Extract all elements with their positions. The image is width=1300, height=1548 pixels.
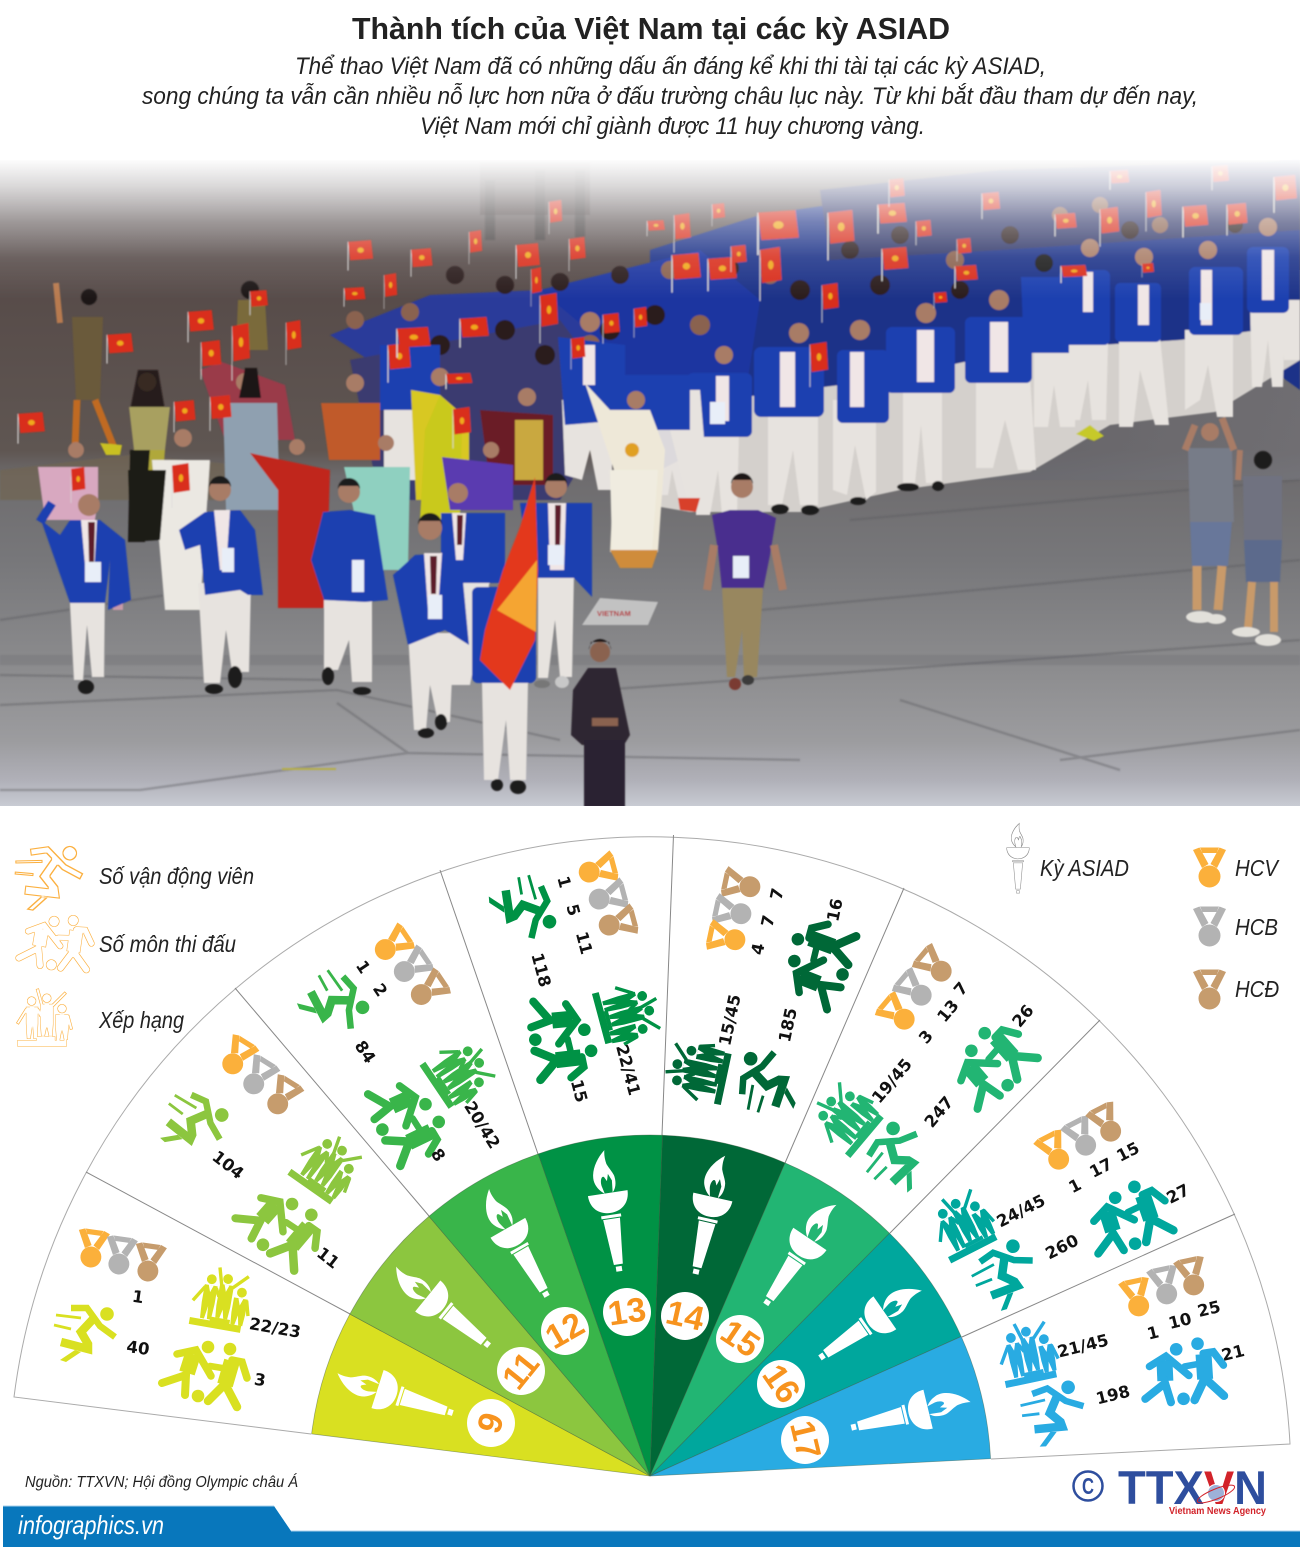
coloured fan wedges	[312, 1135, 991, 1476]
sports value: 15	[567, 1077, 591, 1105]
logo: TTXVN: Vietnam News Agency	[1169, 1505, 1266, 1517]
logo: TTXVN: TTXVN	[1118, 1461, 1267, 1514]
icon: sports outline	[14, 911, 95, 979]
medals	[214, 1032, 306, 1121]
intro text: Thể thao Việt Nam đã có những dấu ấn đáng kể khi thi tài tại các kỳ ASIAD,	[295, 53, 1046, 80]
sports value: 26	[1008, 1001, 1038, 1031]
icon: sports	[153, 1329, 256, 1419]
edition number badges: 17	[782, 1417, 828, 1463]
sports value: 27	[1163, 1180, 1193, 1208]
icon: gold medal	[1193, 848, 1226, 888]
medal counts	[1145, 1297, 1222, 1344]
edition number badges: 13	[605, 1290, 649, 1334]
right crowd marchers	[640, 218, 1300, 515]
athletes value: 40	[125, 1337, 151, 1359]
panel: ASIAD 15	[804, 941, 1052, 1205]
title: Thành tích của Việt Nam tại các kỳ ASIAD	[352, 11, 950, 46]
ranking value: 22/23	[248, 1314, 302, 1342]
icon: ranking	[592, 978, 666, 1049]
intro text: Việt Nam mới chỉ giành được 11 huy chương vàng.	[420, 113, 925, 140]
athletes value: 185	[775, 1006, 801, 1044]
front row delegates	[40, 473, 783, 807]
athletes value: 198	[1094, 1382, 1132, 1408]
label: silver: HCB	[1235, 914, 1278, 940]
medal counts: 5	[562, 902, 584, 918]
front row delegates: VIETNAM	[597, 609, 631, 618]
crowd back mass	[650, 170, 1300, 430]
icon: sports	[773, 913, 868, 1020]
medal counts: 7	[767, 886, 787, 902]
ranking value: 20/42	[460, 1098, 504, 1152]
medal counts: 11	[572, 929, 596, 957]
medal counts: 7	[758, 913, 778, 929]
panel: ASIAD 16	[924, 1100, 1193, 1319]
label: edition: Kỳ ASIAD	[1040, 855, 1129, 881]
ranking value: 21/45	[1055, 1330, 1111, 1362]
medal counts	[1066, 1138, 1143, 1197]
medal counts: 17	[1086, 1154, 1116, 1182]
ranking value: 19/45	[868, 1055, 916, 1107]
medal counts	[748, 886, 787, 957]
torches	[330, 1148, 975, 1447]
medal counts: 2	[369, 980, 391, 1000]
athletes value: 104	[209, 1147, 247, 1183]
icon: athletes	[1014, 1377, 1094, 1452]
medal counts	[915, 978, 972, 1048]
ranking value: 24/45	[994, 1191, 1048, 1231]
medals	[705, 866, 763, 957]
helpers on the right	[1185, 418, 1282, 646]
ranking value: 15/45	[715, 993, 745, 1047]
athletes value: 118	[527, 951, 555, 989]
medal counts: 7	[950, 978, 972, 1000]
sports value: 11	[313, 1243, 343, 1273]
fan outer outline and panel dividers	[14, 835, 1290, 1459]
medal counts: 1	[352, 957, 374, 977]
panel: ASIAD 13	[483, 850, 666, 1105]
icon: sports	[1069, 1166, 1187, 1277]
edition number badges: 9	[470, 1408, 512, 1438]
label: gold: HCV	[1235, 855, 1280, 881]
logo: TTXVN: C	[1082, 1473, 1094, 1499]
medal counts: 15	[1113, 1138, 1143, 1166]
icon: sports	[933, 1007, 1052, 1129]
sports value: 16	[823, 897, 847, 923]
medal counts	[352, 957, 391, 1000]
sports value: 21	[1220, 1341, 1246, 1365]
medals	[74, 1228, 167, 1284]
source note: Nguồn: TTXVN; Hội đồng Olympic châu Á	[25, 1472, 298, 1491]
intro text	[142, 53, 1198, 140]
sports value: 3	[253, 1370, 267, 1390]
edition number badges: 16	[755, 1358, 807, 1410]
icon: ranking	[804, 1075, 887, 1158]
icon: sports	[218, 1170, 338, 1285]
panel: ASIAD 12	[287, 921, 504, 1180]
label: sports: Số môn thi đấu	[99, 931, 236, 957]
medal counts: 4	[748, 941, 768, 957]
panel: ASIAD 17	[994, 1255, 1246, 1452]
medals	[873, 941, 959, 1038]
label: bronze: HCĐ	[1235, 976, 1279, 1002]
icon: athletes	[853, 1112, 945, 1205]
medal counts: 10	[1167, 1309, 1193, 1333]
medal counts	[553, 874, 596, 957]
legend: torch and medals	[1006, 823, 1280, 1010]
icon: sports	[1128, 1328, 1236, 1423]
medal counts: 25	[1196, 1297, 1222, 1321]
icon: athletes	[962, 1233, 1051, 1319]
label: ranking: Xếp hạng	[98, 1007, 184, 1033]
ranking value: 22/41	[612, 1042, 644, 1098]
medal count: 1	[131, 1287, 145, 1307]
sports value: 8	[427, 1145, 449, 1165]
icon: athletes outline	[12, 845, 86, 913]
icon: athletes	[287, 959, 377, 1050]
edition number badges: 15	[714, 1313, 766, 1365]
icon: bronze medal	[1193, 970, 1226, 1010]
intro text: song chúng ta vẫn cần nhiều nỗ lực hơn nữa ở đấu trường châu lục này. Từ khi bắt đầu tham dự đến nay,	[142, 82, 1198, 110]
medal counts: 13	[933, 996, 963, 1026]
icon: ranking	[189, 1264, 255, 1334]
icon: athletes	[147, 1080, 238, 1169]
footer band	[3, 1506, 1300, 1547]
site name: infographics.vn	[18, 1510, 164, 1540]
flags	[18, 165, 1297, 508]
icon: torch outline	[1006, 823, 1030, 893]
icon: sports	[509, 982, 608, 1092]
middle-left crowd	[38, 281, 690, 610]
icon: silver medal	[1193, 906, 1226, 946]
medal counts: 1	[553, 874, 575, 890]
medal counts: 1	[1066, 1175, 1084, 1197]
medals	[1118, 1255, 1211, 1319]
medal counts: 1	[1145, 1322, 1161, 1344]
edition number badges	[467, 1288, 829, 1464]
edition number badges: 14	[662, 1293, 708, 1339]
icon: athletes	[46, 1299, 123, 1370]
legend: athletes, sports, ranking	[12, 845, 254, 1047]
athletes value: 84	[351, 1037, 379, 1067]
icon: ranking	[661, 1037, 733, 1105]
medal counts: 3	[915, 1026, 937, 1048]
panel: ASIAD 9	[46, 1228, 302, 1419]
icon: ranking	[420, 1032, 502, 1113]
medals	[368, 921, 453, 1013]
icon: athletes	[732, 1043, 807, 1122]
icon: ranking	[994, 1317, 1062, 1388]
icon: athletes	[483, 868, 561, 950]
icon: ranking outline	[17, 989, 72, 1047]
panel: ASIAD 11	[147, 1032, 369, 1285]
edition number badges: 12	[539, 1305, 591, 1357]
icon: ranking	[287, 1125, 369, 1207]
athletes value: 260	[1042, 1231, 1082, 1263]
icon: ranking	[924, 1183, 1002, 1263]
icon: sports	[345, 1059, 461, 1180]
medals	[1032, 1100, 1129, 1176]
edition number badges: 11	[495, 1345, 547, 1397]
medals	[575, 850, 640, 943]
label: athletes: Số vận động viên	[99, 863, 254, 889]
athletes value: 247	[921, 1093, 957, 1131]
panel: ASIAD 14	[661, 866, 868, 1122]
white fade	[0, 158, 1300, 300]
photo: Vietnamese delegation parade	[0, 158, 1300, 807]
